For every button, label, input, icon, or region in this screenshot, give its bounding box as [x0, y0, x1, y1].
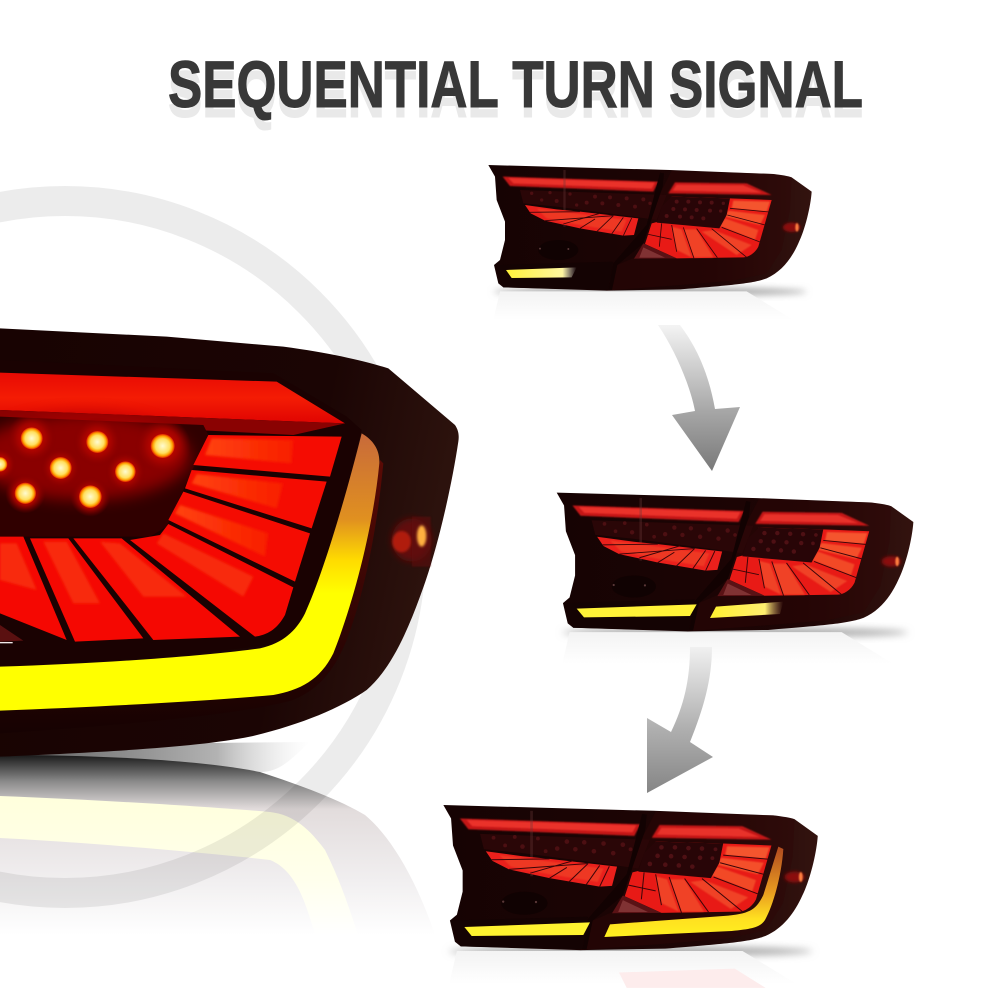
red band under bar	[0, 410, 345, 435]
top red light bar	[0, 373, 345, 423]
arrow 2	[647, 647, 713, 793]
small lamp 2 reflection	[562, 627, 908, 664]
small lamp 3: full sequence	[443, 805, 818, 950]
pale yellow mirrored tube	[0, 796, 358, 935]
main enlarged tail lamp	[0, 328, 459, 757]
yellow segment 1	[506, 267, 577, 278]
LED red glow zone	[0, 413, 190, 500]
main lamp reflection	[0, 742, 435, 935]
title with shadow	[168, 47, 863, 131]
soft shadow right of main lamp	[0, 742, 310, 772]
lamp housing	[0, 328, 459, 757]
decorative ring circle	[0, 201, 411, 893]
yellow sequential tube	[0, 433, 379, 711]
side marker light	[392, 517, 432, 567]
yellow segments	[577, 602, 783, 618]
yellow segments	[464, 847, 783, 937]
LED lights	[0, 413, 191, 517]
lower lens gradient	[0, 460, 383, 733]
LED housing	[0, 417, 208, 537]
small lamp 3 reflection	[449, 946, 812, 988]
fan panels	[0, 435, 342, 643]
inner dark lens	[0, 360, 362, 667]
small lamp 1 reflection	[493, 287, 807, 320]
grey mirrored lamp body	[0, 755, 435, 935]
arrow 1	[658, 325, 740, 471]
small lamp 1: beginning of sequence	[488, 165, 812, 291]
small lamp 2: middle of sequence	[557, 493, 913, 631]
small triangle lens	[0, 625, 23, 642]
